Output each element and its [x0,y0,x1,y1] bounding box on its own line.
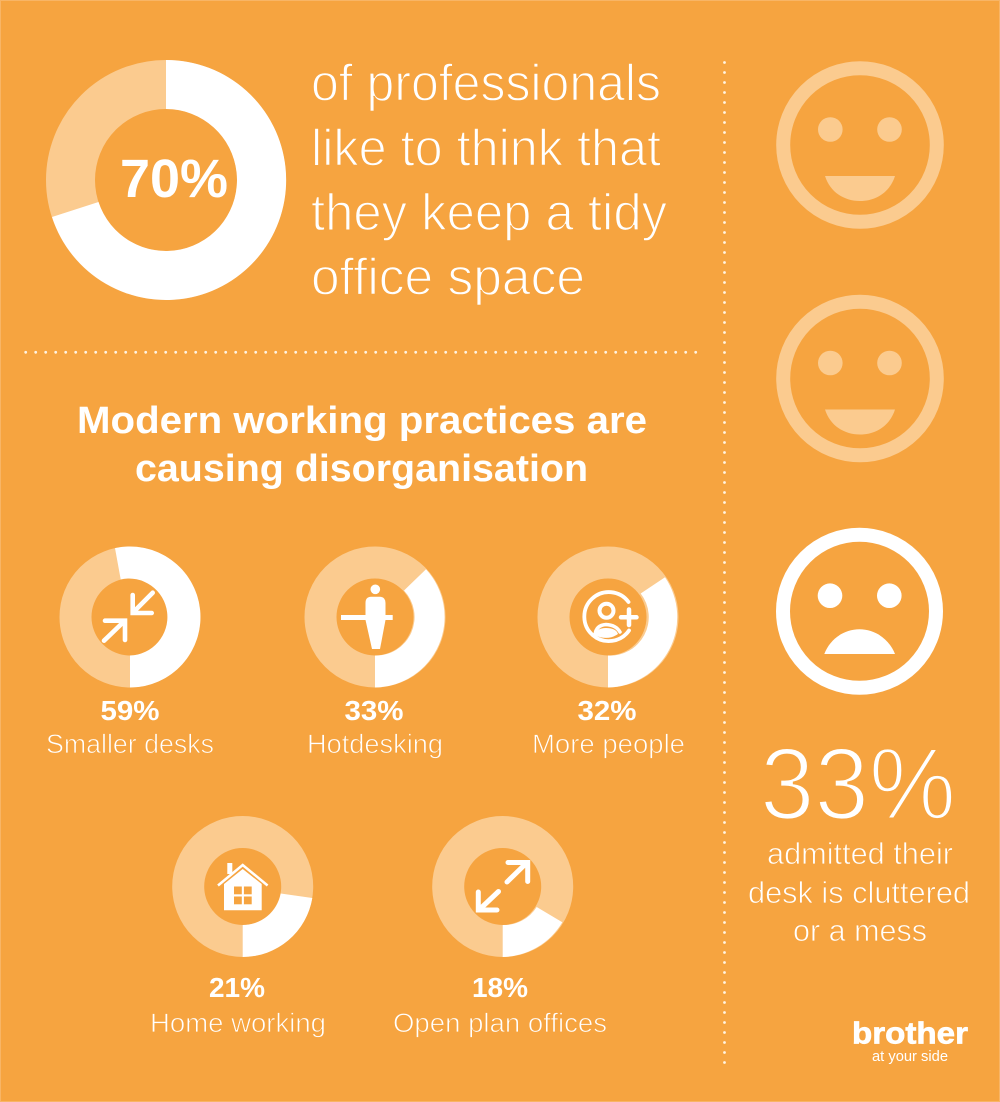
label: 21% Home working: 21% [209,972,265,1003]
stat: 33% admitted their desk is cluttered or a mess: 33% [760,727,956,841]
label: 59% Smaller desks: 59% [100,695,160,726]
label: 18% Open plan offices [393,972,607,1038]
headline text: of professionals: office space [311,248,585,306]
label: 59% Smaller desks [46,695,214,759]
headline text: of professionals [311,54,667,306]
icon: house [218,863,268,910]
stat: 33% admitted their desk is cluttered or a mess [748,727,970,948]
donut: 59% [76,546,200,688]
headline text: of professionals: of professionals [311,54,661,112]
section heading: causing disorganisation [135,448,588,490]
donut: 18% [448,832,562,957]
label: 18% Open plan offices: Open plan offices [393,1008,607,1038]
label: 32% More people [532,695,685,759]
stat: 33% admitted their desk is cluttered or a mess: desk is cluttered [748,875,970,910]
label: 32% More people: 32% [578,695,637,726]
icon: smiley 1 [783,68,937,222]
headline text: of professionals: they keep a tidy [311,184,667,242]
panel: hotdesking 33% [307,562,445,759]
label: 21% Home working [150,972,326,1038]
panel: home working 21% [150,832,326,1038]
stat: 33% admitted their desk is cluttered or a mess: admitted their [767,836,953,871]
donut: 21% [188,832,312,957]
label: 33% Hotdesking [307,695,443,759]
panel: open plan offices 18% [393,832,607,1038]
label: 33% Hotdesking: Hotdesking [307,729,443,759]
donut: 33% [320,562,445,688]
icon: person at desk [341,584,393,649]
icon: smiley 2 [783,302,937,455]
section heading [77,400,647,490]
headline text: of professionals: like to think that [311,120,662,178]
logo: brother at your side: brother [852,1016,968,1050]
logo: brother at your side [852,1016,968,1065]
panel: smaller desks 59% [46,546,214,759]
logo: brother at your side: at your side [872,1049,948,1065]
icon: add person [584,592,636,641]
label: 21% Home working: Home working [150,1008,326,1038]
icon: sad face [783,535,936,688]
donut: 32% [554,562,677,688]
big donut chart: 70%: 70% [120,149,228,209]
stat: 33% admitted their desk is cluttered or a mess: or a mess [793,913,927,948]
icon: compress arrows [104,593,153,641]
panel: more people 32% [532,562,685,759]
label: 32% More people: More people [532,729,685,759]
label: 18% Open plan offices: 18% [472,972,528,1003]
icon: expand arrows [478,862,528,910]
label: 33% Hotdesking: 33% [344,695,404,726]
section heading: Modern working practices are [77,400,647,442]
label: 59% Smaller desks: Smaller desks [46,729,214,759]
big donut chart: 70% [52,60,286,300]
